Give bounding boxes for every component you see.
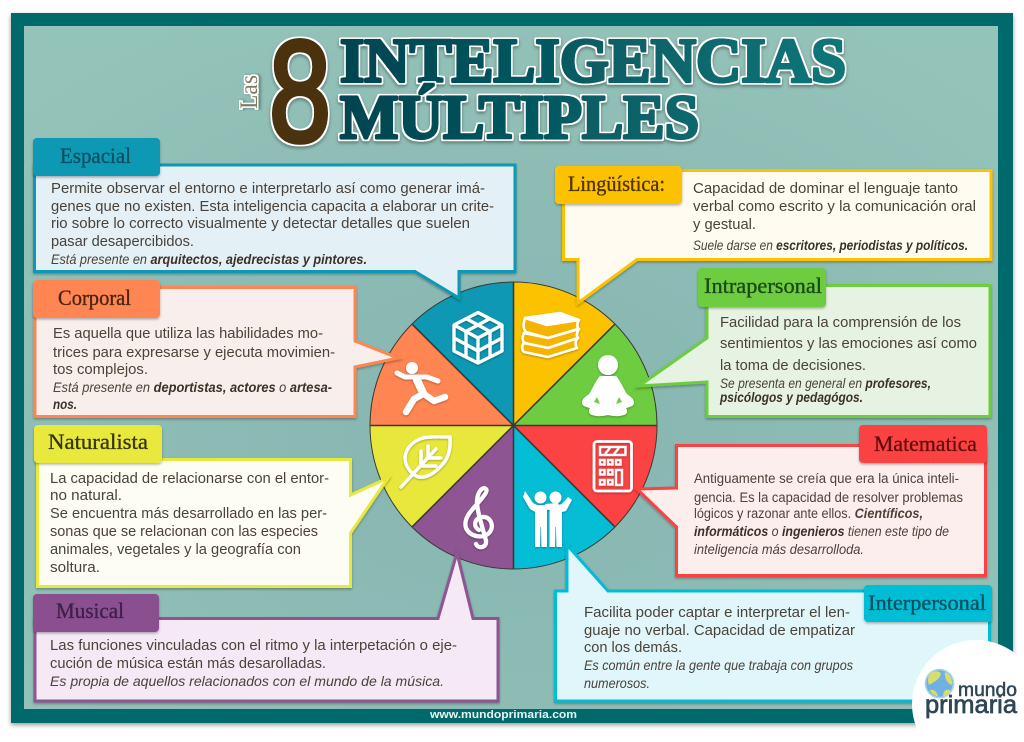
- tab: Naturalista: [34, 425, 162, 463]
- text: Matematica description: lógicos y razonar ante ellos. Científicos,: [694, 506, 923, 521]
- text: Matematica description: informáticos o ingenieros tienen este tipo de: [694, 524, 949, 539]
- text: Matematica description: Antiguamente se creía que era la única inteli-: [694, 471, 959, 486]
- text: Musical description: Las funciones vinculadas con el ritmo y la interpetación o eje-: [50, 638, 457, 654]
- text: Lingüística description: Suele darse en escritores, periodistas y políticos.: [693, 238, 968, 253]
- text: Lingüística description: [693, 181, 976, 253]
- icon: meditating person: [582, 355, 634, 416]
- text: Interpersonal description: con los demás.: [584, 640, 682, 656]
- panel: Intrapersonal: [639, 268, 990, 416]
- text: Lingüística description: verbal como escrito y la comunicación oral: [693, 199, 976, 215]
- logo: mundo primaria: [912, 640, 1024, 742]
- text: Corporal description: Es aquella que utiliza las habilidades mo-: [53, 326, 323, 342]
- text: Interpersonal description: guaje no verbal. Capacidad de empatizar: [584, 623, 855, 639]
- tab title: Corporal: Corporal: [58, 285, 131, 310]
- panel: Matematica: [637, 425, 987, 576]
- text: Naturalista description: Se encuentra más desarrollado en las per-: [50, 506, 327, 522]
- text: Espacial description: rio sobre lo correcto visualmente y detectar detalles que suelen: [51, 216, 470, 232]
- tab: Matematica: [859, 425, 987, 463]
- text: Lingüística description: Capacidad de dominar el lenguaje tanto: [693, 181, 958, 197]
- tab title: Interpersonal: Interpersonal: [868, 590, 986, 615]
- website url: www.mundoprimaria.com: [429, 709, 577, 721]
- text: Naturalista description: sonas que se relacionan con las especies: [50, 524, 318, 540]
- text: Espacial description: [51, 181, 494, 267]
- panel: Interpersonal: [556, 545, 992, 701]
- text: Intrapersonal description: psicólogos y pedagógos.: [719, 390, 863, 405]
- text: Espacial description: pasar desapercibidos.: [51, 234, 194, 250]
- panel: Musical: [33, 553, 498, 701]
- text: Naturalista description: soltura.: [50, 560, 100, 576]
- text: Corporal description: trices para expresarse y ejecuta movimien-: [53, 345, 335, 361]
- icon: treble clef: [465, 488, 492, 547]
- panel: Corporal: [33, 280, 398, 416]
- text: Naturalista description: animales, vegetales y la geografía con: [50, 542, 301, 558]
- icon: calculator: [594, 442, 632, 491]
- title number: 8: 8: [269, 11, 331, 172]
- logo word: primaria: primaria: [925, 691, 1017, 719]
- tab title: Naturalista: Naturalista: [48, 429, 148, 454]
- icon: books: [522, 313, 579, 357]
- title word: Las: Las: [236, 75, 263, 109]
- tab: Lingüística: [555, 166, 682, 204]
- text: Intrapersonal description: la toma de decisiones.: [720, 358, 866, 374]
- text: Corporal description: tos complejos.: [53, 362, 148, 378]
- text: Musical description: [50, 638, 457, 689]
- tab: Interpersonal: [864, 585, 992, 622]
- icon: leaf: [401, 437, 450, 487]
- text: Corporal description: [53, 326, 335, 412]
- text: Interpersonal description: Facilita poder captar e interpretar el len-: [584, 605, 850, 621]
- logo word: mundo: mundo: [958, 680, 1017, 701]
- panel: Espacial: [33, 138, 515, 298]
- tab title: Espacial: Espacial: [60, 143, 131, 168]
- text: Musical description: Es propia de aquellos relacionados con el mundo de la música.: [50, 673, 444, 689]
- text: Corporal description: nos.: [53, 397, 77, 412]
- text: Interpersonal description: Es común entre la gente que trabaja con grupos: [584, 658, 853, 673]
- tab title: Musical: Musical: [56, 598, 124, 623]
- text: Intrapersonal description: Facilidad para la comprensión de los: [720, 315, 961, 331]
- title line: INTELIGENCIAS: INTELIGENCIAS: [340, 28, 846, 96]
- text: Espacial description: Está presente en arquitectos, ajedrecistas y pintores.: [51, 252, 367, 267]
- tab: Intrapersonal: [698, 268, 826, 307]
- text: Intrapersonal description: sentimientos y las emociones así como: [720, 336, 977, 352]
- text: Matematica description: gencia. Es la capacidad de resolver problemas: [694, 490, 963, 505]
- text: Intrapersonal description: [719, 315, 977, 405]
- text: Lingüística description: y gestual.: [693, 217, 756, 233]
- icon: runner: [397, 362, 445, 412]
- text: Naturalista description: [50, 471, 329, 576]
- text: Naturalista description: no natural.: [50, 488, 122, 504]
- wheel: eight coloured segments: [370, 282, 658, 570]
- text: Matematica description: inteligencia más desarrolloda.: [694, 542, 864, 557]
- tab title: Matematica: Matematica: [874, 431, 977, 456]
- text: Musical description: cución de música están más desarolladas.: [50, 656, 326, 672]
- tab title: Intrapersonal: Intrapersonal: [704, 273, 822, 298]
- icon: cube: [454, 312, 502, 363]
- text: Espacial description: genes que no existen. Esta inteligencia capacita a elaborar un crite-: [51, 199, 494, 215]
- text: Interpersonal description: numerosos.: [584, 676, 650, 691]
- icon: globe: [926, 670, 954, 698]
- tab: Corporal: [33, 280, 160, 318]
- title line: MÚLTIPLES: MÚLTIPLES: [340, 84, 699, 152]
- text: Corporal description: Está presente en deportistas, actores o artesa-: [53, 380, 332, 395]
- text: Naturalista description: La capacidad de relacionarse con el entor-: [50, 471, 329, 487]
- text: Intrapersonal description: Se presenta en general en profesores,: [720, 376, 931, 391]
- text: Espacial description: Permite observar el entorno e interpretarlo así como generar imá-: [51, 181, 485, 197]
- text: Matematica description: [694, 471, 963, 557]
- panel: Lingüística: [555, 166, 991, 303]
- panel: Naturalista: [34, 425, 388, 586]
- tab title: Lingüística: Lingüística:: [568, 171, 665, 196]
- title: Las 8 Inteligencias Múltiples: [236, 11, 846, 172]
- tab: Musical: [33, 594, 159, 632]
- text: Interpersonal description: [584, 605, 855, 691]
- tab: Espacial: [33, 138, 160, 176]
- icon: two people embracing: [523, 491, 572, 547]
